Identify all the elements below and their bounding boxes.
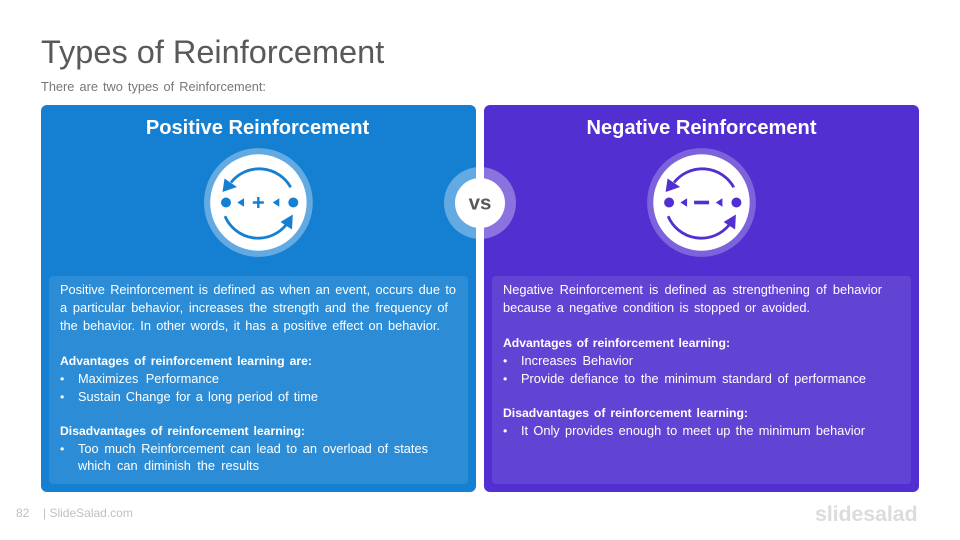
text block: negative reinforcement: [503, 282, 882, 438]
panel: positive reinforcement background: [41, 105, 476, 492]
advantages list: •: [60, 390, 64, 404]
definition: Negative Reinforcement is defined as strengthening of behavior: [503, 282, 882, 297]
definition: the behavior. In other words, it has a positive effect on behavior.: [60, 318, 440, 333]
disadvantages list: which can diminish the results: [78, 458, 259, 473]
definition: a particular behavior, increases the strength and the frequency of: [60, 300, 448, 315]
icon: negative reinforcement cycle: [647, 148, 756, 257]
definition: because a negative condition is stopped or avoided.: [503, 300, 810, 315]
disadvantages list: Disadvantages of reinforcement learning:: [503, 406, 748, 420]
title: Types of Reinforcement: [41, 34, 384, 70]
advantages list: Advantages of reinforcement learning are:: [60, 354, 312, 368]
advantages list: •: [503, 354, 507, 368]
panel: negative text box: [492, 276, 911, 484]
advantages list: [60, 354, 318, 404]
definition: [503, 282, 882, 315]
advantages list: Provide defiance to the minimum standard of performance: [521, 371, 866, 386]
disadvantages list: [60, 424, 428, 473]
advantages list: Sustain Change for a long period of time: [78, 389, 318, 404]
panel: negative reinforcement background: [484, 105, 919, 492]
definition: Positive Reinforcement is defined as when an event, occurs due to: [60, 282, 456, 297]
heading: negative reinforcement: Negative Reinforcement: [586, 117, 817, 139]
disadvantages list: •: [60, 442, 64, 456]
disadvantages list: It Only provides enough to meet up the minimum behavior: [521, 423, 865, 438]
advantages list: •: [503, 372, 507, 386]
vs badge: [444, 160, 516, 246]
disadvantages list: Too much Reinforcement can lead to an overload of states: [78, 441, 428, 456]
page number: 82: [16, 506, 29, 520]
text block: positive reinforcement: [60, 282, 456, 473]
advantages list: [503, 336, 866, 386]
advantages list: •: [60, 372, 64, 386]
advantages list: Increases Behavior: [521, 353, 633, 368]
logo wordmark: slidesalad: [815, 502, 917, 526]
icon: positive reinforcement cycle: [204, 148, 313, 257]
footer source: | SlideSalad.com: [43, 506, 133, 520]
disadvantages list: [503, 406, 865, 438]
panel: positive text box: [49, 276, 468, 484]
heading: positive reinforcement: Positive Reinforcement: [146, 117, 369, 139]
vs badge: vs: [469, 192, 491, 214]
advantages list: Maximizes Performance: [78, 371, 219, 386]
disadvantages list: Disadvantages of reinforcement learning:: [60, 424, 305, 438]
disadvantages list: •: [503, 424, 507, 438]
advantages list: Advantages of reinforcement learning:: [503, 336, 730, 350]
definition: [60, 282, 456, 333]
subtitle: There are two types of Reinforcement:: [41, 79, 266, 94]
